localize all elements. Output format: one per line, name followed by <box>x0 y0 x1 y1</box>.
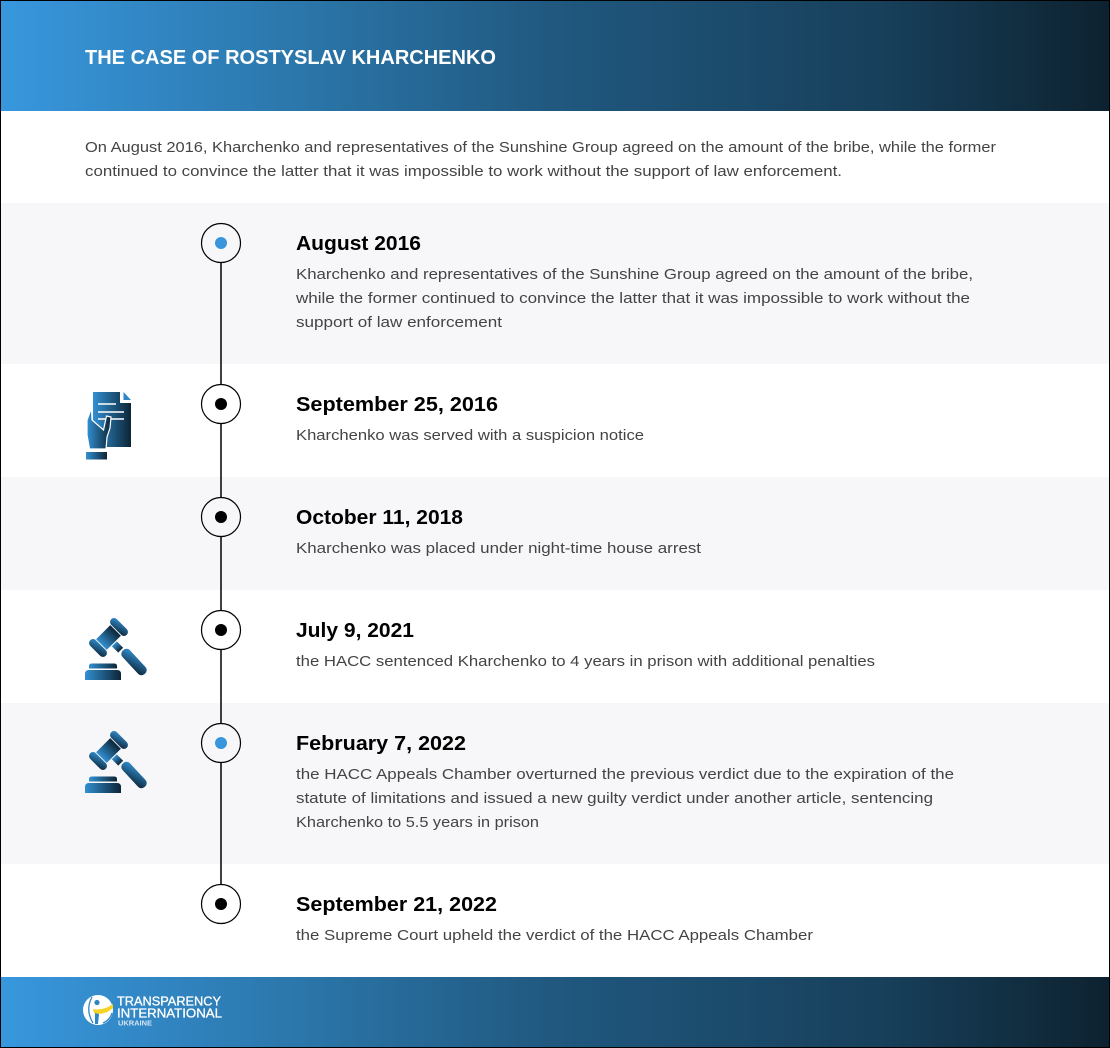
event: October 11, 2018 <box>202 498 702 557</box>
date: September 21, 2022 <box>296 893 497 916</box>
intro paragraph: continued to convince the latter that it was impossible to work without the support of law enforcement. <box>85 163 842 180</box>
date: October 11, 2018 <box>296 506 463 529</box>
description: Kharchenko and representatives of the Sunshine Group agreed on the amount of the bribe, <box>296 266 973 283</box>
icon: gavel <box>85 616 149 680</box>
marker <box>202 884 240 924</box>
date: September 25, 2016 <box>296 393 498 416</box>
footer banner <box>1 977 1109 1047</box>
intro paragraph <box>85 139 996 180</box>
date: July 9, 2021 <box>296 619 414 642</box>
title: THE CASE OF ROSTYSLAV KHARCHENKO <box>85 47 496 69</box>
marker <box>202 610 240 650</box>
description <box>295 266 973 331</box>
timeline line <box>220 243 222 904</box>
icon: gavel <box>85 729 149 793</box>
event: September 25, 2016 <box>202 384 644 444</box>
marker <box>202 384 240 424</box>
logo text: INTERNATIONAL <box>117 1006 222 1020</box>
logo emblem <box>83 995 113 1025</box>
event: July 9, 2021 <box>202 610 875 670</box>
logo text: UKRAINE <box>118 1021 152 1028</box>
marker <box>202 724 240 762</box>
description: Kharchenko was placed under night-time house arrest <box>296 540 702 557</box>
description: the HACC sentenced Kharchenko to 4 years in prison with additional penalties <box>296 653 875 670</box>
header banner <box>1 1 1109 111</box>
description: while the former continued to convince the latter that it was impossible to work without the <box>295 290 970 307</box>
description: the Supreme Court upheld the verdict of the HACC Appeals Chamber <box>296 927 813 944</box>
logo text: TRANSPARENCY <box>117 995 222 1009</box>
icon: document in hand <box>86 392 131 460</box>
description: Kharchenko was served with a suspicion notice <box>296 427 644 444</box>
description: Kharchenko to 5.5 years in prison <box>296 814 539 831</box>
logo text <box>117 995 222 1028</box>
event: September 21, 2022 <box>202 884 813 944</box>
marker <box>202 224 240 262</box>
event: August 2016 <box>202 224 973 331</box>
description: statute of limitations and issued a new guilty verdict under another article, sentencing <box>296 790 933 807</box>
description: support of law enforcement <box>296 314 503 331</box>
date: February 7, 2022 <box>296 732 466 755</box>
logo: Transparency International Ukraine <box>83 995 222 1028</box>
intro paragraph: On August 2016, Kharchenko and representatives of the Sunshine Group agreed on the amount of the bribe, while the former <box>85 139 996 156</box>
description <box>296 766 954 831</box>
event: February 7, 2022 <box>202 724 954 831</box>
marker <box>202 498 240 536</box>
row backgrounds <box>1 203 1109 864</box>
date: August 2016 <box>296 232 421 255</box>
description: the HACC Appeals Chamber overturned the previous verdict due to the expiration of the <box>296 766 954 783</box>
